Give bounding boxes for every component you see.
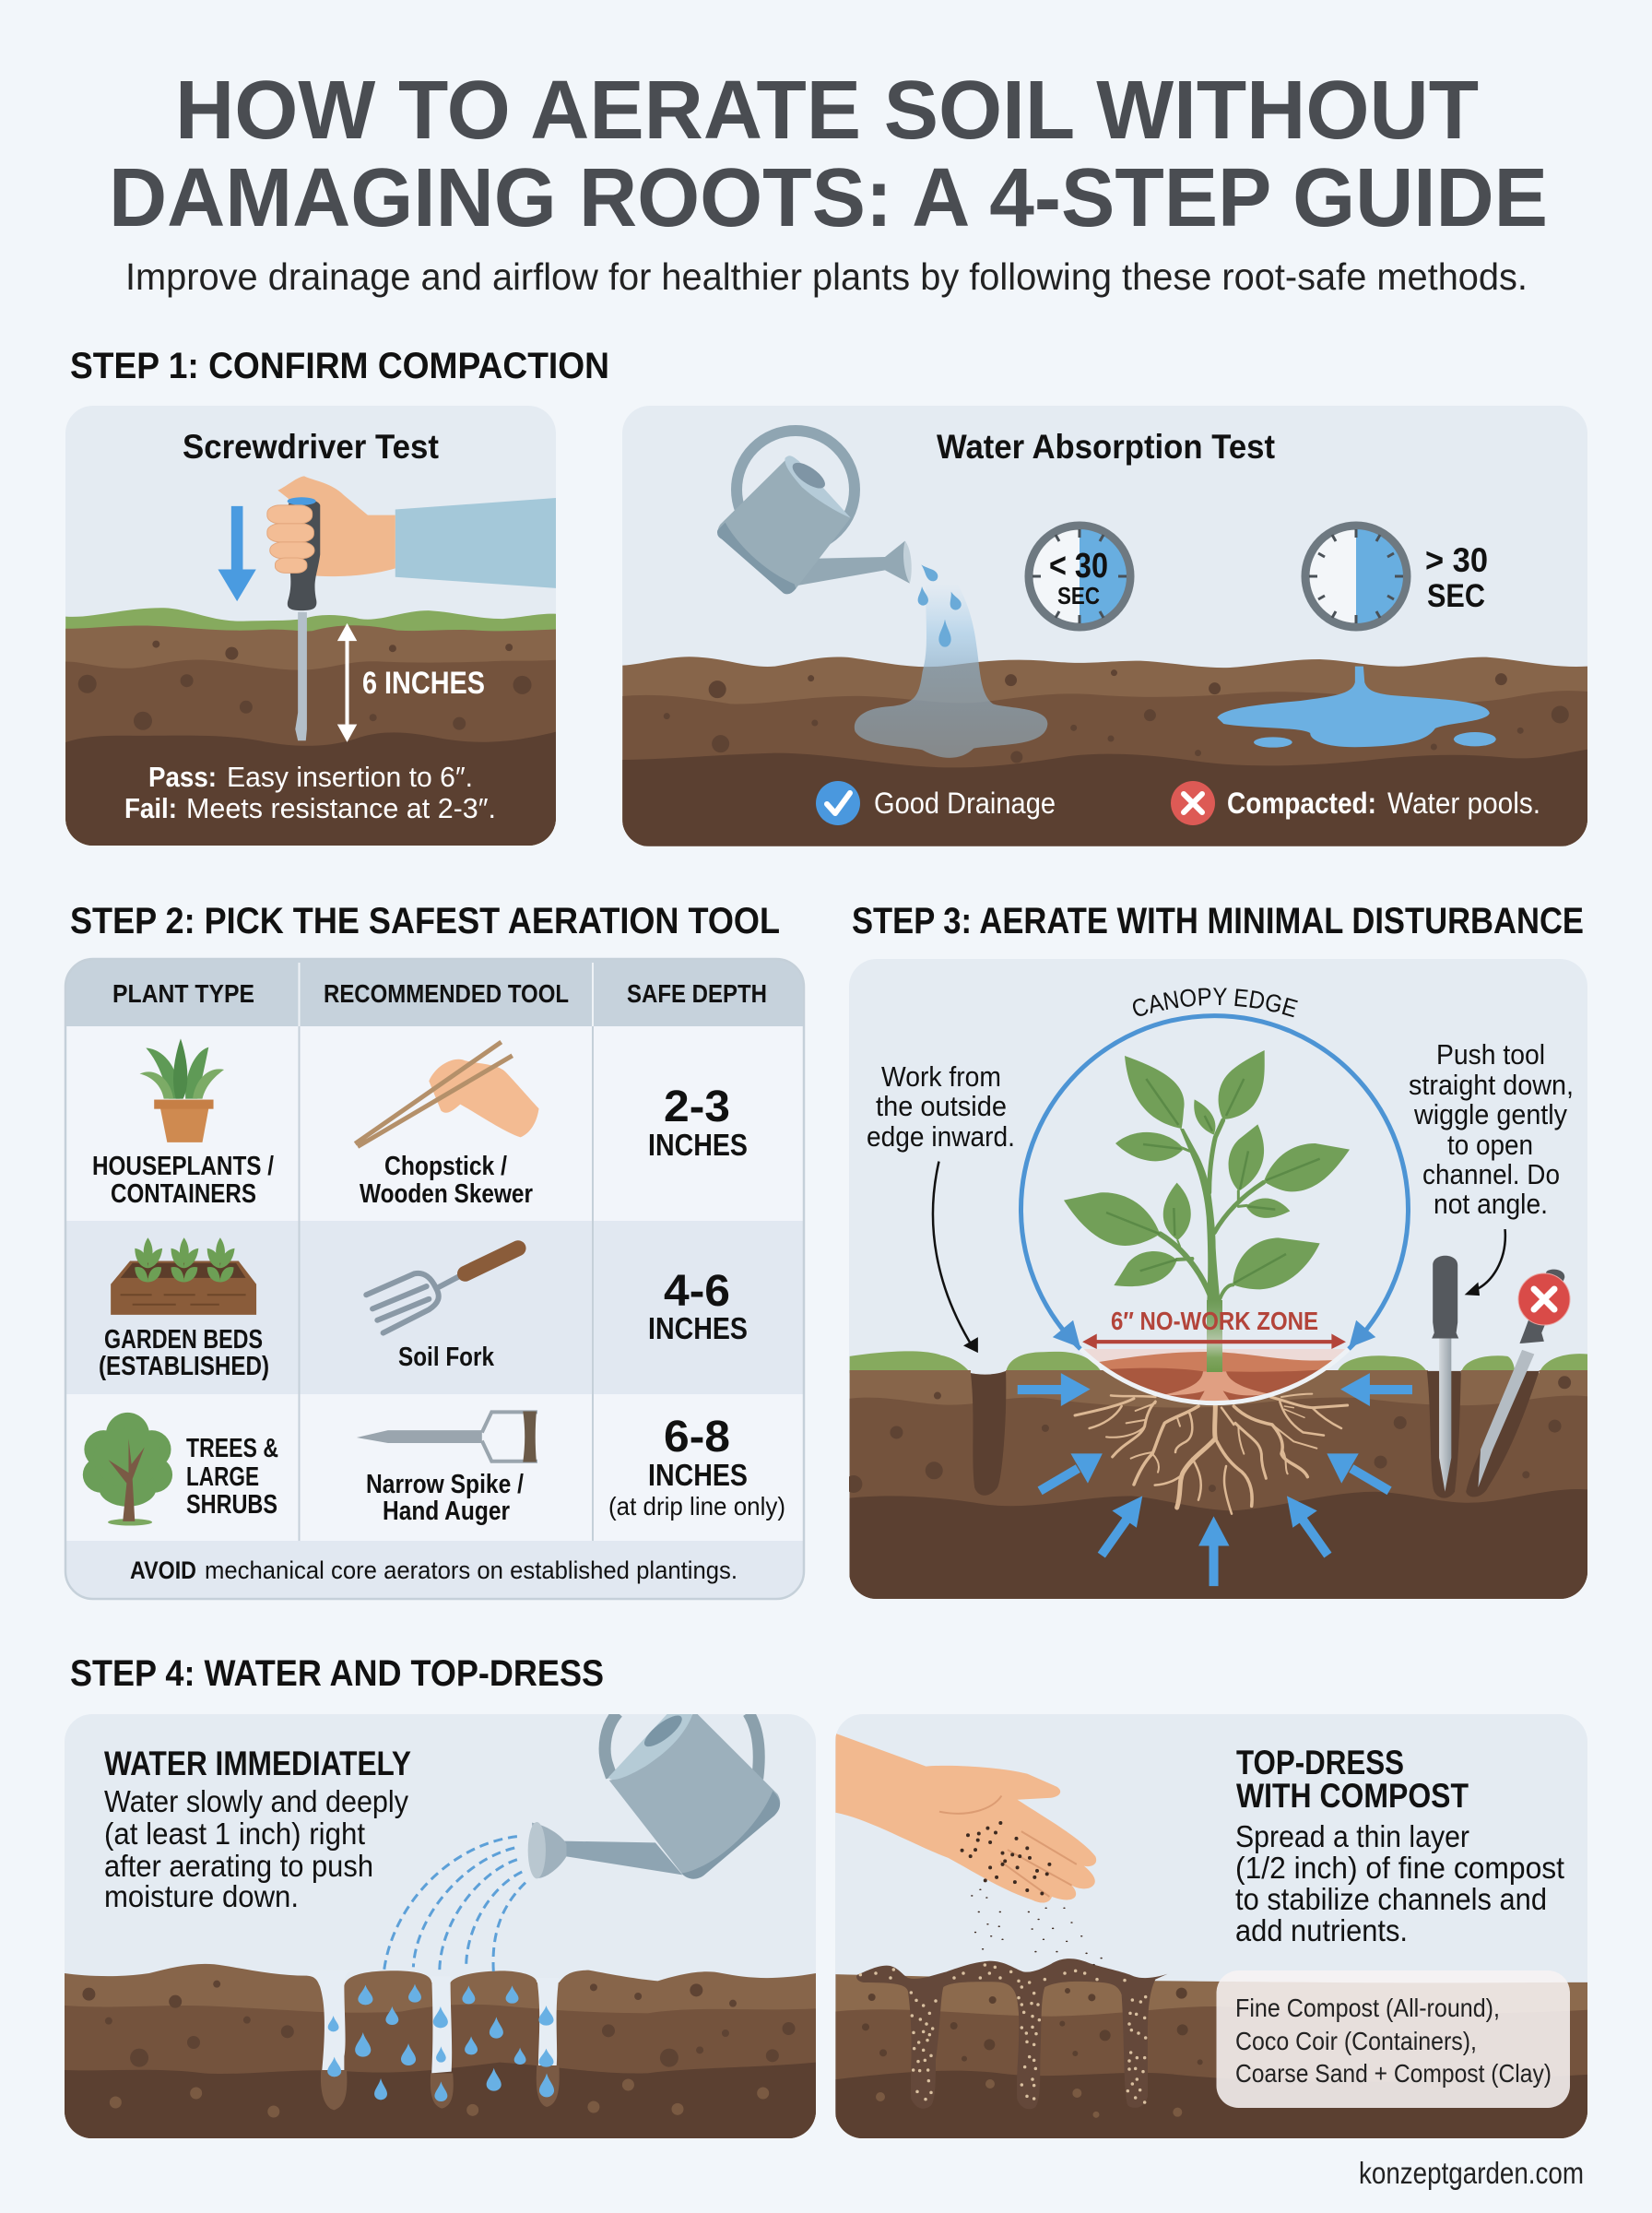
label: soil fork: Soil Fork — [398, 1343, 495, 1372]
panel: minimal disturbance — [849, 959, 1587, 1599]
note: push straight down: straight down, — [1409, 1069, 1574, 1101]
heading: step 1: STEP 1: CONFIRM COMPACTION — [70, 346, 609, 386]
soil layers: top-dress — [835, 1974, 1587, 2138]
icon: fast timer: SEC — [1057, 582, 1100, 609]
label: trees: SHRUBS — [186, 1490, 277, 1520]
depth: 2-3 inches: 2-3 — [664, 1083, 730, 1131]
icon: slow timer — [1305, 526, 1407, 627]
icon: raised garden bed — [111, 1237, 256, 1315]
soil with channels — [65, 1964, 816, 2138]
canopy edge circle — [1021, 1016, 1409, 1403]
depth: 4-6 inches: 4-6 — [664, 1267, 730, 1316]
table header: RECOMMENDED TOOL — [324, 979, 569, 1008]
icon: fast timer: < 30 — [1049, 547, 1108, 586]
depth: 6-8 inches — [608, 1413, 785, 1521]
footer: website: konzeptgarden.com — [1359, 2156, 1584, 2190]
label: chopstick: Wooden Skewer — [360, 1179, 533, 1209]
heading: screwdriver test: Screwdriver Test — [183, 428, 439, 466]
heading: water absorption test: Water Absorption Test — [937, 428, 1275, 466]
label: over 30 sec: > 30 — [1425, 541, 1488, 579]
panel: tool table — [65, 959, 804, 1599]
water drops in soil — [327, 1984, 554, 2101]
table header: PLANT TYPE — [112, 979, 254, 1008]
label: garden beds: GARDEN BEDS — [104, 1325, 263, 1355]
note: push straight down: wiggle gently — [1413, 1098, 1567, 1130]
heading: step 2: STEP 2: PICK THE SAFEST AERATION TOOL — [70, 901, 780, 941]
note: push straight down: channel. Do — [1422, 1158, 1560, 1190]
panel: water absorption test — [622, 406, 1587, 846]
label: over 30 sec — [1426, 548, 1487, 607]
label: canopy edge: CANOPY EDGE — [1132, 988, 1298, 1018]
label: garden beds — [99, 1325, 269, 1381]
label: trees: TREES & — [186, 1434, 278, 1463]
icon: check — [816, 781, 860, 825]
soil and grass: step 3 — [850, 1351, 1588, 1599]
icon: fast timer — [1029, 526, 1130, 627]
label: good drainage: Good Drainage — [874, 787, 1056, 820]
text: top-dress: add nutrients. — [1235, 1913, 1408, 1947]
text: top-dress: Spread a thin layer — [1235, 1819, 1469, 1853]
heading: step 4: STEP 4: WATER AND TOP-DRESS — [70, 1653, 604, 1694]
label: narrow spike: Narrow Spike / — [366, 1470, 524, 1499]
fail text — [125, 798, 494, 819]
pass text — [149, 766, 470, 793]
depth: 2-3 inches: INCHES — [648, 1128, 748, 1162]
note: push straight down: to open — [1447, 1129, 1533, 1161]
icon: puddle on compacted soil — [1217, 667, 1496, 748]
table footer note: mechanical core aerators on established plantings. — [205, 1556, 738, 1584]
text: top-dress — [1235, 1744, 1564, 1947]
icon: cross — [1171, 781, 1215, 825]
text: water immediately: (at least 1 inch) right — [104, 1817, 365, 1851]
icon: angled screwdriver — [1478, 1270, 1564, 1487]
note: outside edge inward — [867, 1060, 1015, 1153]
arrow: six inch depth — [337, 623, 357, 741]
label: over 30 sec: SEC — [1427, 578, 1485, 614]
text: top-dress: to stabilize channels and — [1235, 1882, 1547, 1916]
soil and grass: screwdriver test — [65, 608, 556, 846]
icon: watering can — [528, 1710, 780, 1879]
arrow: push down — [218, 506, 256, 601]
callout: material options — [1217, 1970, 1570, 2108]
note: push straight down: Push tool — [1436, 1038, 1545, 1071]
depth: 6-8 inches: 6-8 — [664, 1413, 730, 1462]
table header: SAFE DEPTH — [627, 979, 767, 1008]
dashed water streams — [384, 1837, 525, 1976]
subtitle: Improve drainage and airflow for healthier plants by following these root-safe methods. — [125, 255, 1528, 298]
text: water immediately: Water slowly and deeply — [104, 1784, 408, 1818]
pass text: Easy insertion to 6″. — [227, 761, 473, 793]
depth: 4-6 inches: INCHES — [648, 1311, 748, 1345]
arrows: work inward — [1018, 1373, 1412, 1586]
text: top-dress: TOP-DRESS — [1236, 1744, 1404, 1781]
icon: red cross — [1518, 1273, 1570, 1325]
label: compacted: Water pools. — [1387, 787, 1540, 820]
panel: screwdriver test — [65, 406, 556, 846]
label: trees — [186, 1434, 278, 1520]
depth: 6-8 inches: INCHES — [648, 1458, 748, 1492]
compost filled channels — [856, 1959, 1200, 2160]
callout: material options: Coco Coir (Containers), — [1235, 2027, 1477, 2055]
label: compacted: Compacted: — [1227, 787, 1376, 820]
callout arrow: right — [1465, 1229, 1505, 1296]
text: top-dress: WITH COMPOST — [1236, 1777, 1469, 1815]
icon: narrow spike — [357, 1412, 537, 1462]
icon: watering can pouring — [717, 431, 912, 594]
label: houseplants: HOUSEPLANTS / — [92, 1152, 274, 1181]
fail text: Meets resistance at 2-3″. — [186, 792, 496, 824]
note: push straight down: not angle. — [1434, 1188, 1548, 1220]
icon: plant — [1064, 1050, 1350, 1302]
label: narrow spike: Hand Auger — [383, 1497, 510, 1526]
falling compost specks — [972, 1889, 1102, 1965]
soil layers: water test — [622, 657, 1587, 846]
water stream and absorbed water — [855, 584, 1047, 758]
label: no-work zone: 6″ NO-WORK ZONE — [1111, 1307, 1318, 1335]
icon: vertical screwdriver — [1432, 1256, 1458, 1492]
label: narrow spike — [366, 1470, 524, 1526]
no-work zone — [1084, 1349, 1345, 1402]
panel: top-dress with compost — [835, 1714, 1587, 2160]
label: 6 inches: 6 INCHES — [362, 666, 485, 701]
title: HOW TO AERATE SOIL WITHOUT — [175, 65, 1479, 157]
label: chopstick: Chopstick / — [384, 1152, 507, 1181]
label: trees: LARGE — [186, 1462, 259, 1492]
title — [109, 65, 1548, 244]
text: water immediately: after aerating to push — [104, 1849, 373, 1883]
callout: material options: Fine Compost (All-round), — [1235, 1994, 1500, 2022]
lower stem — [1207, 1300, 1222, 1372]
fail text: Fail: — [124, 792, 177, 824]
depth: 4-6 inches — [648, 1267, 748, 1345]
icon: soil fork — [366, 1249, 518, 1333]
table header — [112, 979, 767, 1008]
label: no-work zone — [1083, 1307, 1345, 1349]
title: DAMAGING ROOTS: A 4-STEP GUIDE — [109, 152, 1548, 244]
text: top-dress: (1/2 inch) of fine compost — [1235, 1851, 1564, 1885]
panel: water immediately — [65, 1710, 816, 2138]
depth: 2-3 inches — [648, 1083, 748, 1162]
text: water immediately: WATER IMMEDIATELY — [104, 1745, 411, 1782]
text: water immediately: moisture down. — [104, 1879, 299, 1913]
note: outside edge inward: edge inward. — [867, 1120, 1015, 1153]
label: compacted — [1228, 791, 1538, 819]
text: water immediately — [104, 1745, 411, 1913]
callout arrow: left — [933, 1162, 978, 1353]
note: outside edge inward: Work from — [881, 1060, 1001, 1093]
icon: chopsticks in hand — [355, 1042, 539, 1147]
label: garden beds: (ESTABLISHED) — [99, 1352, 269, 1381]
label: chopstick — [360, 1152, 533, 1209]
depth: 6-8 inches: (at drip line only) — [608, 1492, 785, 1521]
icon: roots — [1075, 1394, 1348, 1514]
note: push straight down — [1409, 1038, 1574, 1220]
callout: material options: Coarse Sand + Compost (Clay) — [1235, 2059, 1552, 2088]
table footer note: AVOID — [130, 1556, 196, 1584]
icon: hand sprinkling compost — [835, 1734, 1096, 1903]
pass text: Pass: — [148, 761, 217, 793]
water drops — [916, 561, 962, 647]
icon: tree — [83, 1413, 172, 1525]
label: houseplants: CONTAINERS — [111, 1179, 256, 1209]
note: outside edge inward: the outside — [876, 1090, 1007, 1122]
label: houseplants — [92, 1152, 274, 1209]
icon: hand holding screwdriver — [267, 476, 556, 740]
icon: potted houseplant — [140, 1038, 224, 1142]
